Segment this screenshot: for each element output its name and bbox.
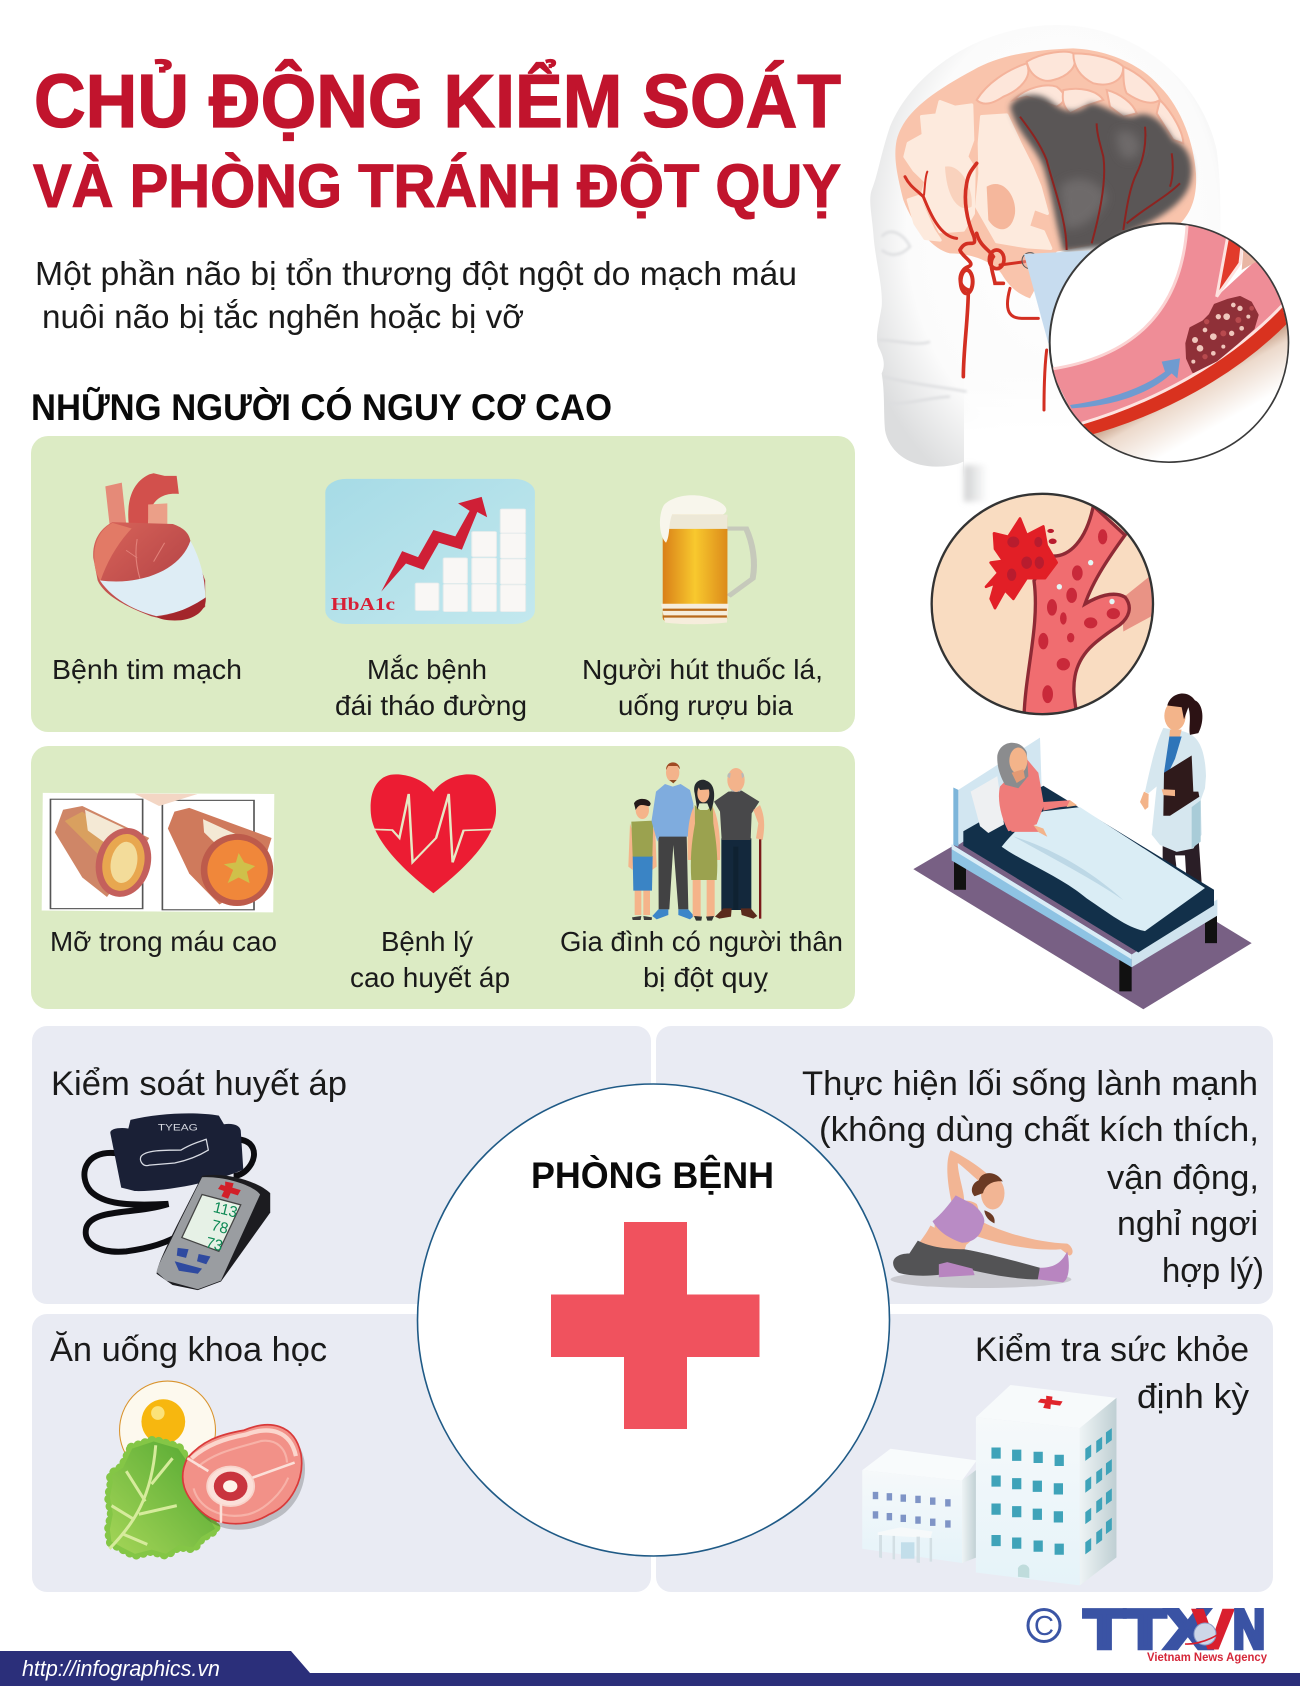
- artery lumen: [1050, 220, 1293, 428]
- doctor: [1140, 694, 1206, 883]
- mattress: [963, 786, 1214, 952]
- sparkles: [1057, 560, 1115, 604]
- label: smoking and alcohol: uống rượu bia: [618, 690, 793, 721]
- text: regular check-ups: [975, 1331, 1249, 1416]
- label: smoking and alcohol: [582, 654, 823, 721]
- subtitle: [35, 255, 797, 335]
- wall highlight: [1082, 304, 1283, 423]
- blood flow arrow: [1070, 358, 1180, 408]
- panel: blood pressure control: [32, 1026, 651, 1304]
- text: healthy lifestyle: nghỉ ngơi: [1117, 1205, 1258, 1243]
- purple rug: [913, 804, 1252, 1009]
- child: [628, 799, 657, 920]
- label: diabetes: đái tháo đường: [335, 690, 527, 721]
- label: family history: [560, 926, 843, 993]
- text: regular check-ups: định kỳ: [1137, 1378, 1249, 1416]
- gyri folds: [977, 52, 1183, 143]
- magnifier cone: [1024, 251, 1090, 343]
- icon: hospital buildings: [862, 1385, 1116, 1585]
- copyright symbol: [1028, 1610, 1060, 1642]
- icon: beer mug: [660, 495, 754, 624]
- patient: [997, 743, 1077, 837]
- label: family history: Gia đình có người thân: [560, 926, 843, 957]
- text: healthy lifestyle: Thực hiện lối sống lành mạnh: [802, 1065, 1258, 1103]
- brain and head illustration: [870, 25, 1293, 510]
- icon: blood pressure monitor: [84, 1113, 270, 1290]
- icon: rising chart with sugar cubes: HbA1c: [331, 594, 395, 614]
- text: healthy lifestyle: (không dùng chất kích thích,: [819, 1111, 1259, 1149]
- heading: high risk groups: NHỮNG NGƯỜI CÓ NGUY CƠ CAO: [31, 386, 612, 428]
- copyright symbol: C: [1034, 1610, 1054, 1641]
- bed legs: [954, 857, 1217, 991]
- text: control blood pressure: Kiểm soát huyết áp: [51, 1065, 347, 1103]
- tall man: [652, 762, 694, 919]
- zoom ring: [1022, 253, 1038, 269]
- icon: blocked arteries: [42, 793, 274, 912]
- circle outline: [932, 494, 1153, 714]
- head silhouette: [870, 25, 1221, 507]
- logo: TTXVN: Vietnam News Agency: [1147, 1650, 1267, 1664]
- text: healthy eating: Ăn uống khoa học: [50, 1331, 327, 1369]
- subtitle: Một phần não bị tổn thương đột ngột do mạch máu: [35, 255, 797, 292]
- illustration: ruptured vessel: [932, 494, 1155, 718]
- upper wall highlight: [1050, 220, 1187, 369]
- icon: family: [628, 762, 764, 921]
- text: healthy lifestyle: vận động,: [1107, 1159, 1259, 1197]
- branch artery: [1217, 233, 1243, 297]
- icon: blood pressure monitor: 78: [209, 1217, 230, 1238]
- basal structures: [987, 184, 1015, 229]
- lettuce: [109, 1440, 217, 1555]
- blood cells: [1038, 529, 1120, 703]
- label: smoking and alcohol: Người hút thuốc lá,: [582, 654, 823, 685]
- illustration: patient and doctor: [913, 694, 1252, 1009]
- tissue under the artery: [1087, 318, 1288, 462]
- icon: rising chart with sugar cubes: [325, 479, 535, 624]
- panel: healthy lifestyle: [656, 1026, 1273, 1304]
- white matter: [905, 102, 1051, 248]
- panel: risk row 1: [31, 436, 855, 732]
- bed frame: [952, 844, 1217, 967]
- panel: healthy diet: [32, 1314, 651, 1592]
- label: diabetes: Mắc bệnh: [367, 654, 487, 685]
- headboard: [953, 738, 1042, 847]
- text: regular check-ups: Kiểm tra sức khỏe: [975, 1331, 1249, 1369]
- icon: blood pressure monitor: 113: [212, 1199, 239, 1222]
- label: heart disease: Bệnh tim mạch: [52, 654, 242, 685]
- blood burst: [986, 519, 1057, 608]
- label: hypertension: [350, 926, 510, 993]
- woman: [688, 780, 720, 921]
- infarct region: [1010, 95, 1192, 252]
- burst cells: [1007, 529, 1057, 581]
- pillow: [971, 776, 1004, 833]
- title: CHỦ ĐỘNG KIỂM SOÁT: [34, 59, 841, 143]
- icon: blood pressure monitor: 73: [204, 1234, 224, 1255]
- neck shading: [964, 465, 987, 502]
- label: hypertension: Bệnh lý: [381, 926, 473, 957]
- title: [33, 59, 841, 220]
- footer url: http://infographics.vn: [22, 1656, 220, 1681]
- facial features: [878, 232, 967, 404]
- artery wall: [1081, 312, 1288, 430]
- brain: [895, 48, 1196, 298]
- footer bar: [0, 1651, 1300, 1686]
- logo: TTXVN: TTX: [1084, 1598, 1210, 1660]
- side branch: [1123, 577, 1152, 632]
- infarct shading: [1060, 131, 1140, 228]
- clot: [1187, 297, 1257, 372]
- blanket: [1002, 807, 1205, 931]
- panel: regular health checks: [656, 1314, 1273, 1592]
- label: family history: bị đột quỵ: [643, 962, 768, 993]
- heading: prevention: PHÒNG BỆNH: [531, 1154, 774, 1196]
- logo: TTXVN: N: [1233, 1598, 1265, 1660]
- magnifier lens: blocked artery: [1050, 220, 1293, 467]
- logo: TTXVN: [1084, 1598, 1267, 1664]
- icon: heart with pulse: [371, 774, 496, 893]
- subtitle: nuôi não bị tắc nghẽn hoặc bị vỡ: [42, 298, 524, 335]
- text: healthy lifestyle: [802, 1065, 1264, 1290]
- icon: woman stretching: [890, 1150, 1073, 1288]
- title: VÀ PHÒNG TRÁNH ĐỘT QUỴ: [33, 152, 841, 220]
- icon: food: [109, 1381, 305, 1555]
- blanket fold: [1013, 836, 1123, 900]
- panel: risk row 2: [31, 746, 855, 1009]
- icon: bandaged heart: [93, 473, 206, 620]
- text: healthy lifestyle: hợp lý): [1162, 1252, 1264, 1290]
- label: diabetes: [335, 654, 527, 721]
- icon: red cross: [551, 1222, 760, 1429]
- label: hypertension: cao huyết áp: [350, 962, 510, 993]
- icon: blood pressure monitor: TYEAG: [158, 1123, 198, 1133]
- arteries: [905, 163, 1047, 410]
- old man: [714, 768, 764, 919]
- vessel body: [1024, 506, 1129, 718]
- branch tissue: [1242, 250, 1256, 270]
- neck fade: [964, 367, 1251, 510]
- label: high blood fat: Mỡ trong máu cao: [50, 926, 277, 957]
- logo: TTXVN: V: [1193, 1598, 1233, 1660]
- arteries in damaged region: [1020, 117, 1180, 250]
- prevention circle: [418, 1084, 890, 1556]
